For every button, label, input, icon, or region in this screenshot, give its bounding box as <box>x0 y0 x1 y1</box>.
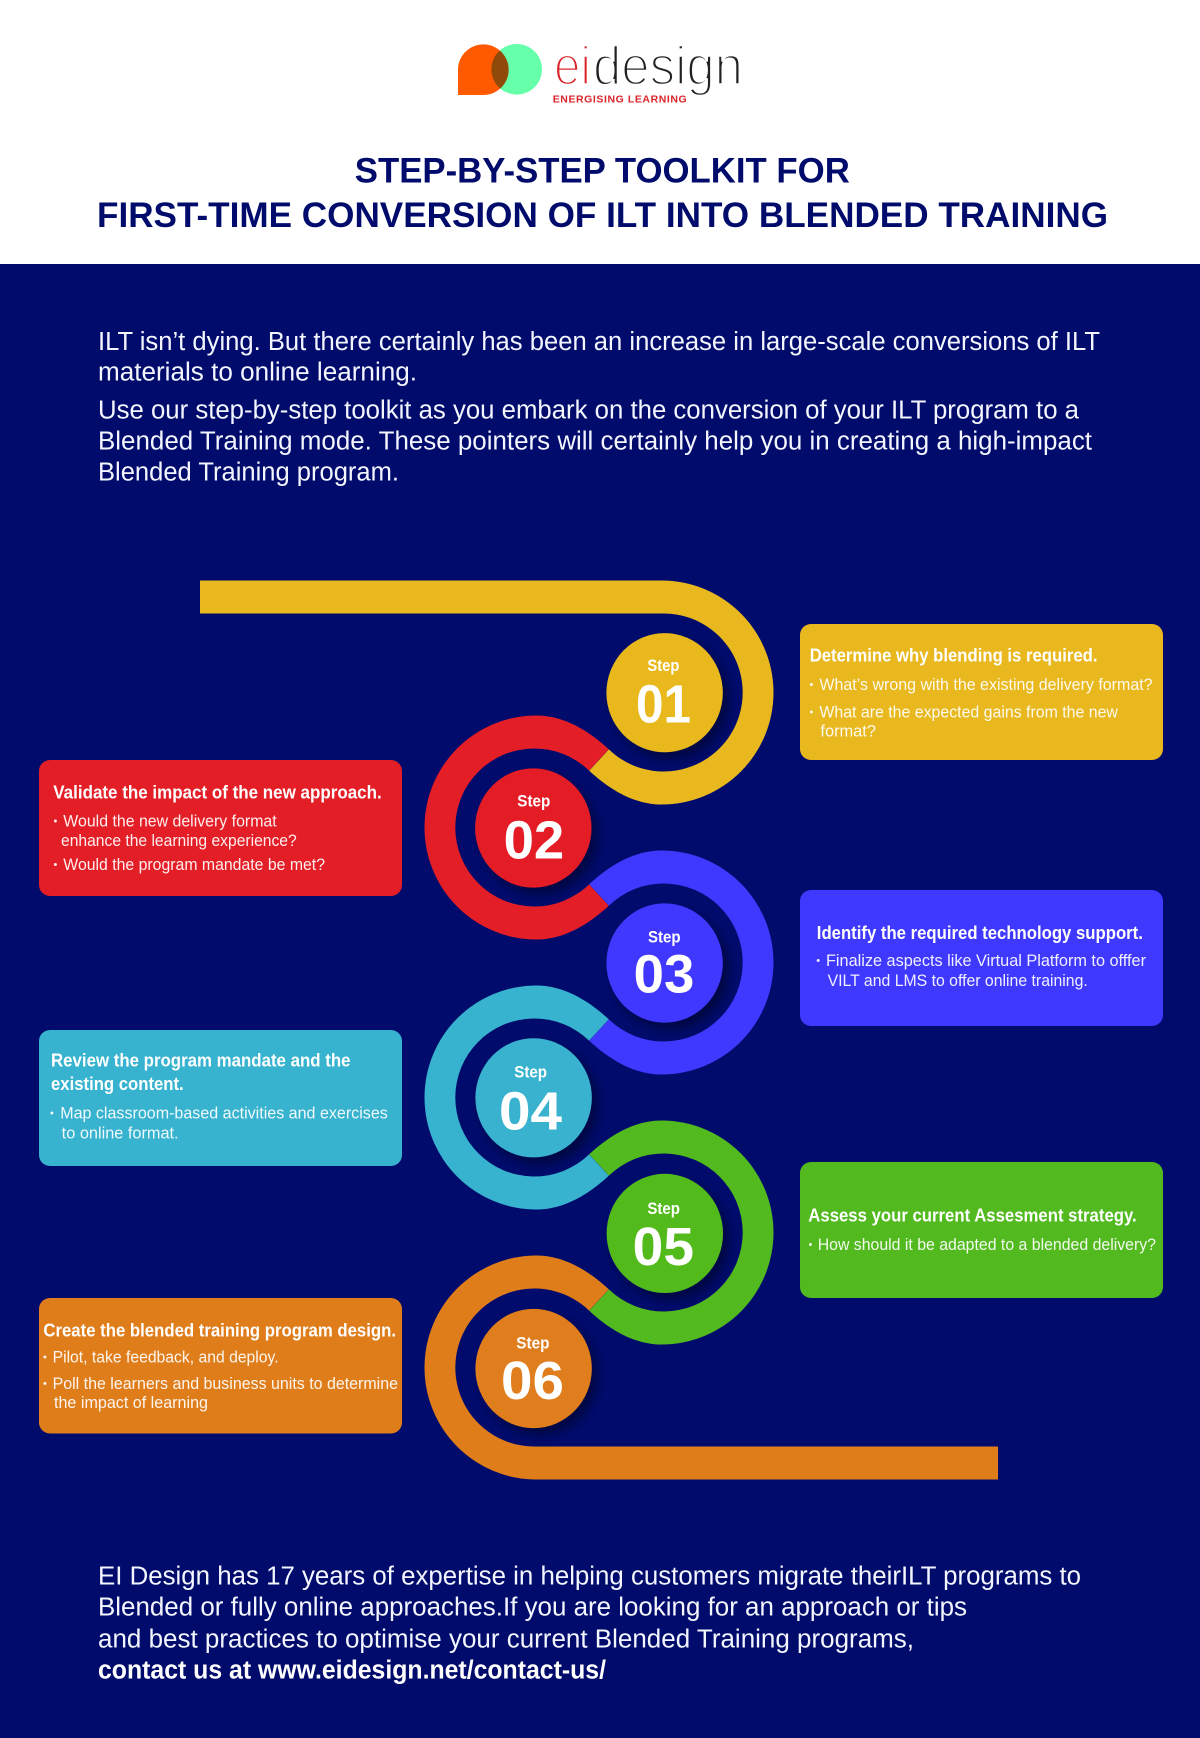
panel 6 bullets: the impact of learning <box>54 1394 208 1412</box>
path segment 5 <box>589 1120 774 1344</box>
panel: step 6 <box>39 1298 402 1434</box>
step path <box>200 580 998 1480</box>
panel 4 bullets: to online format. <box>62 1124 179 1142</box>
panel 3 background <box>800 890 1163 1026</box>
panel 5 heading: Assess your current Assesment strategy. <box>808 1205 1137 1226</box>
panel 2 bullets: enhance the learning experience? <box>61 832 297 850</box>
logo <box>458 44 738 102</box>
panel 6 heading: Create the blended training program design. <box>43 1320 396 1341</box>
panel 2 bullets: Would the program mandate be met? <box>63 856 325 874</box>
title: FIRST-TIME CONVERSION OF ILT INTO BLENDED TRAINING <box>97 196 1108 235</box>
step badge 06 <box>475 1309 592 1428</box>
panel 3 bullets: • <box>816 955 820 967</box>
panel 6 background <box>39 1298 402 1434</box>
path segment 3 <box>589 850 774 1074</box>
panel 1 bullets: • <box>810 706 814 718</box>
header band <box>0 0 1200 264</box>
step badge 02 <box>475 768 592 888</box>
title <box>97 151 1108 235</box>
panel 1 bullets <box>810 676 1153 741</box>
logo tagline: ENERGISING LEARNING <box>553 93 687 105</box>
panel 2 heading: Validate the impact of the new approach. <box>53 781 382 802</box>
step badge 04: 04 <box>499 1081 562 1141</box>
logo mark <box>458 44 542 95</box>
logo wordmark: design <box>593 34 743 96</box>
panel 1 bullets: What’s wrong with the existing delivery format? <box>819 676 1153 694</box>
panel: step 5 <box>800 1162 1163 1298</box>
intro text <box>98 328 1100 487</box>
intro text: ILT isn’t dying. But there certainly has been an increase in large-scale conversions of ILT <box>98 328 1100 356</box>
logo wordmark: ei <box>554 34 591 96</box>
title: STEP-BY-STEP TOOLKIT FOR <box>355 151 850 190</box>
panel 4 bullets: Map classroom-based activities and exercises <box>60 1104 388 1122</box>
panel: step 4 <box>39 1030 402 1166</box>
panel 2 bullets: Would the new delivery format <box>63 813 277 831</box>
panel 4 heading <box>51 1050 350 1094</box>
path segment 6 <box>424 1256 998 1480</box>
panel 4 bullets: • <box>50 1107 54 1119</box>
panel 1 bullets: format? <box>820 723 876 741</box>
intro text: Blended Training mode. These pointers will certainly help you in creating a high-impact <box>98 427 1092 455</box>
panel 6 bullets: • <box>43 1352 47 1364</box>
panel 1 background <box>800 624 1163 760</box>
panel 1 heading: Determine why blending is required. <box>810 645 1098 666</box>
panel 1 bullets: What are the expected gains from the new <box>819 703 1118 721</box>
panel 6 bullets: Poll the learners and business units to determine <box>53 1375 398 1393</box>
panel 3 bullets: VILT and LMS to offer online training. <box>828 972 1088 990</box>
panel 4 background <box>39 1030 402 1166</box>
step badge 03 <box>606 903 723 1023</box>
panel 2 bullets <box>54 813 325 874</box>
intro text: Use our step-by-step toolkit as you embark on the conversion of your ILT program to a <box>98 397 1080 425</box>
path segment 4 <box>424 986 609 1210</box>
panel 2 background <box>39 760 402 896</box>
panel 5 bullets: How should it be adapted to a blended delivery? <box>818 1236 1156 1254</box>
panel 5 background <box>800 1162 1163 1298</box>
panel 2 bullets: • <box>54 816 58 828</box>
step badge 05 <box>607 1174 723 1293</box>
closing text: EI Design has 17 years of expertise in helping customers migrate theirILT programs to <box>98 1562 1081 1590</box>
step badge 03: Step <box>648 928 681 947</box>
panel 4 heading: Review the program mandate and the <box>51 1050 350 1071</box>
panel 3 heading: Identify the required technology support. <box>817 922 1143 943</box>
panel: step 2 <box>39 760 402 896</box>
panel 1 bullets: • <box>810 679 814 691</box>
intro text: Blended Training program. <box>98 459 399 487</box>
contact link: contact us at www.eidesign.net/contact-us/ <box>98 1656 606 1684</box>
panel 5 bullets: • <box>808 1239 812 1251</box>
step badge 04: Step <box>514 1063 547 1082</box>
panel 4 heading: existing content. <box>51 1073 184 1094</box>
panel 6 bullets <box>43 1349 398 1412</box>
step badge 01: Step <box>647 656 679 675</box>
step badge 03: 03 <box>634 945 694 1005</box>
path segment 1 <box>200 580 774 804</box>
closing text: and best practices to optimise your current Blended Training programs, <box>98 1625 914 1653</box>
panel 6 bullets: Pilot, take feedback, and deploy. <box>53 1349 279 1367</box>
closing text: Blended or fully online approaches.If you are looking for an approach or tips <box>98 1594 967 1622</box>
step badge 05: 05 <box>633 1217 694 1277</box>
panel 3 bullets: Finalize aspects like Virtual Platform to offfer <box>826 952 1147 970</box>
panel 2 bullets: • <box>54 859 58 871</box>
panel 4 bullets <box>50 1104 388 1142</box>
step badge 01 <box>606 633 723 752</box>
step badge 02: Step <box>517 792 550 811</box>
path segment 2 <box>424 716 609 940</box>
step badge 06: Step <box>516 1333 550 1352</box>
step badge 01: 01 <box>636 675 691 735</box>
step badge 02: 02 <box>504 810 564 870</box>
panel: step 3 <box>800 890 1163 1026</box>
panel: step 1 <box>800 624 1163 760</box>
panel 3 bullets <box>816 952 1147 990</box>
closing text <box>98 1562 1081 1684</box>
step badge 04 <box>475 1038 592 1157</box>
step badge 06: 06 <box>501 1351 564 1411</box>
step badge 05: Step <box>647 1199 680 1218</box>
intro text: materials to online learning. <box>98 359 417 387</box>
panel 6 bullets: • <box>43 1378 47 1390</box>
